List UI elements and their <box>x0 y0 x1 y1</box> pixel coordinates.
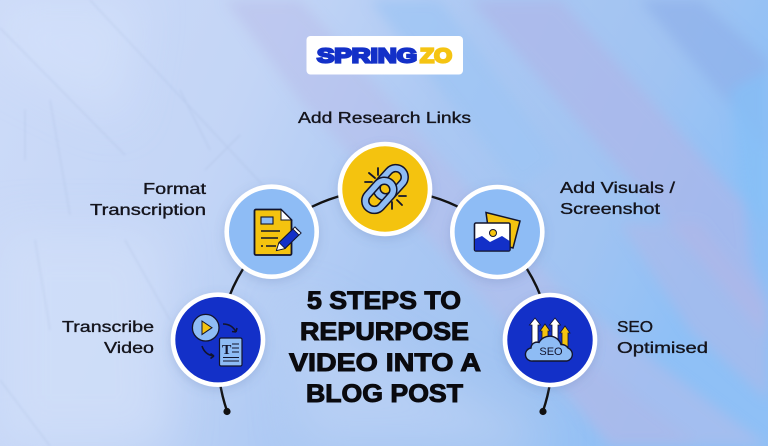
label: transcribe video: Video <box>104 340 154 357</box>
step: seo optimised <box>503 293 597 387</box>
label: format transcription: Format <box>143 181 207 198</box>
label: seo optimised: Optimised <box>617 340 708 357</box>
logo <box>306 36 463 74</box>
title: 5 STEPS TO <box>307 287 461 315</box>
icon: pictures <box>474 212 520 251</box>
label: transcribe video <box>62 319 154 357</box>
connecting arc <box>218 190 552 415</box>
icon: document with pencil <box>254 210 301 255</box>
step: add visuals <box>450 185 545 279</box>
label: add visuals screenshot: Screenshot <box>560 201 661 218</box>
icon: seo cloud with arrows: SEO <box>539 346 563 358</box>
label: add visuals screenshot: Add Visuals / <box>560 180 676 197</box>
label: seo optimised <box>617 319 708 357</box>
logo: SPRING <box>317 46 417 68</box>
label: format transcription <box>90 181 207 219</box>
step: format transcription <box>224 184 319 279</box>
title: REPURPOSE <box>300 318 469 346</box>
label: seo optimised: SEO <box>617 319 653 336</box>
label: add visuals screenshot <box>560 180 676 218</box>
icon: video to text: T <box>222 343 232 358</box>
label: format transcription: Transcription <box>90 202 206 219</box>
title: BLOG POST <box>306 380 463 408</box>
label: transcribe video: Transcribe <box>62 319 154 336</box>
step: add research links <box>338 142 432 236</box>
icon: chain link <box>362 164 408 214</box>
title <box>289 287 481 408</box>
logo: ZO <box>420 46 452 68</box>
title: VIDEO INTO A <box>289 349 481 377</box>
heading: add research links: Add Research Links <box>298 110 471 127</box>
step: transcribe video <box>171 292 265 387</box>
